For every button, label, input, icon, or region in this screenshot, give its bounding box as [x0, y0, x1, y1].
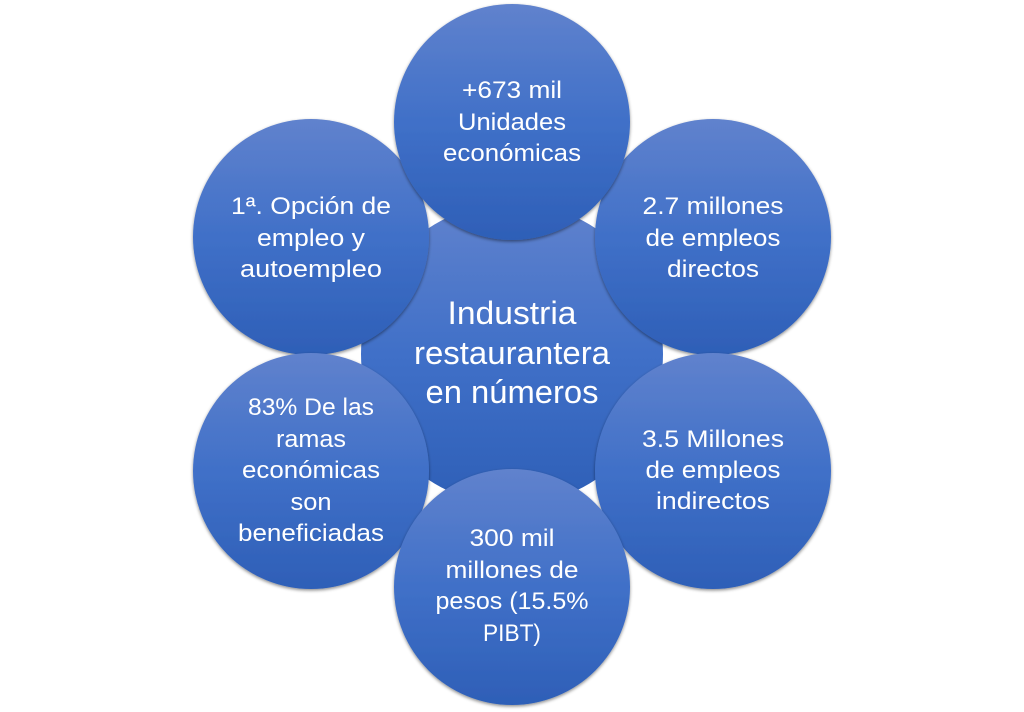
circle: primera opción de empleo: autoempleo [240, 256, 382, 283]
circle: empleos indirectos [595, 353, 831, 589]
central circle: title: restaurantera [414, 335, 610, 371]
central circle: title: en números [426, 374, 598, 410]
circle: ramas económicas: ramas [276, 426, 346, 453]
circle: ramas económicas: beneficiadas [238, 520, 384, 547]
circle: empleos indirectos: indirectos [656, 488, 770, 515]
circle: empleos indirectos: de empleos [646, 457, 780, 484]
circle: ramas económicas: económicas [242, 457, 380, 484]
circle: pesos PIBT: millones de [446, 557, 578, 584]
circle: unidades económicas: Unidades [458, 109, 566, 136]
circle: empleos directos [595, 119, 831, 355]
circle: empleos directos: de empleos [646, 225, 780, 252]
central circle: title: Industria [448, 295, 577, 331]
circle: ramas económicas [193, 353, 429, 589]
circle: pesos PIBT: 300 mil [470, 525, 554, 552]
circle: primera opción de empleo [193, 119, 429, 355]
circle: unidades económicas: económicas [443, 140, 581, 167]
circle: ramas económicas: 83% De las [248, 394, 374, 421]
circle: pesos PIBT: pesos (15.5% [436, 588, 588, 615]
circle: empleos directos: 2.7 millones [642, 193, 784, 220]
circle: ramas económicas: son [290, 489, 332, 516]
central circle: title [361, 203, 663, 505]
circle: pesos PIBT [394, 469, 630, 705]
circle: empleos indirectos: 3.5 Millones [642, 426, 784, 453]
circle: primera opción de empleo: empleo y [257, 225, 366, 252]
circle: unidades económicas [394, 4, 630, 240]
circle: pesos PIBT: PIBT) [483, 620, 541, 647]
circle: unidades económicas: +673 mil [462, 77, 562, 104]
circle: primera opción de empleo: 1ª. Opción de [231, 193, 391, 220]
circle: empleos directos: directos [667, 256, 759, 283]
